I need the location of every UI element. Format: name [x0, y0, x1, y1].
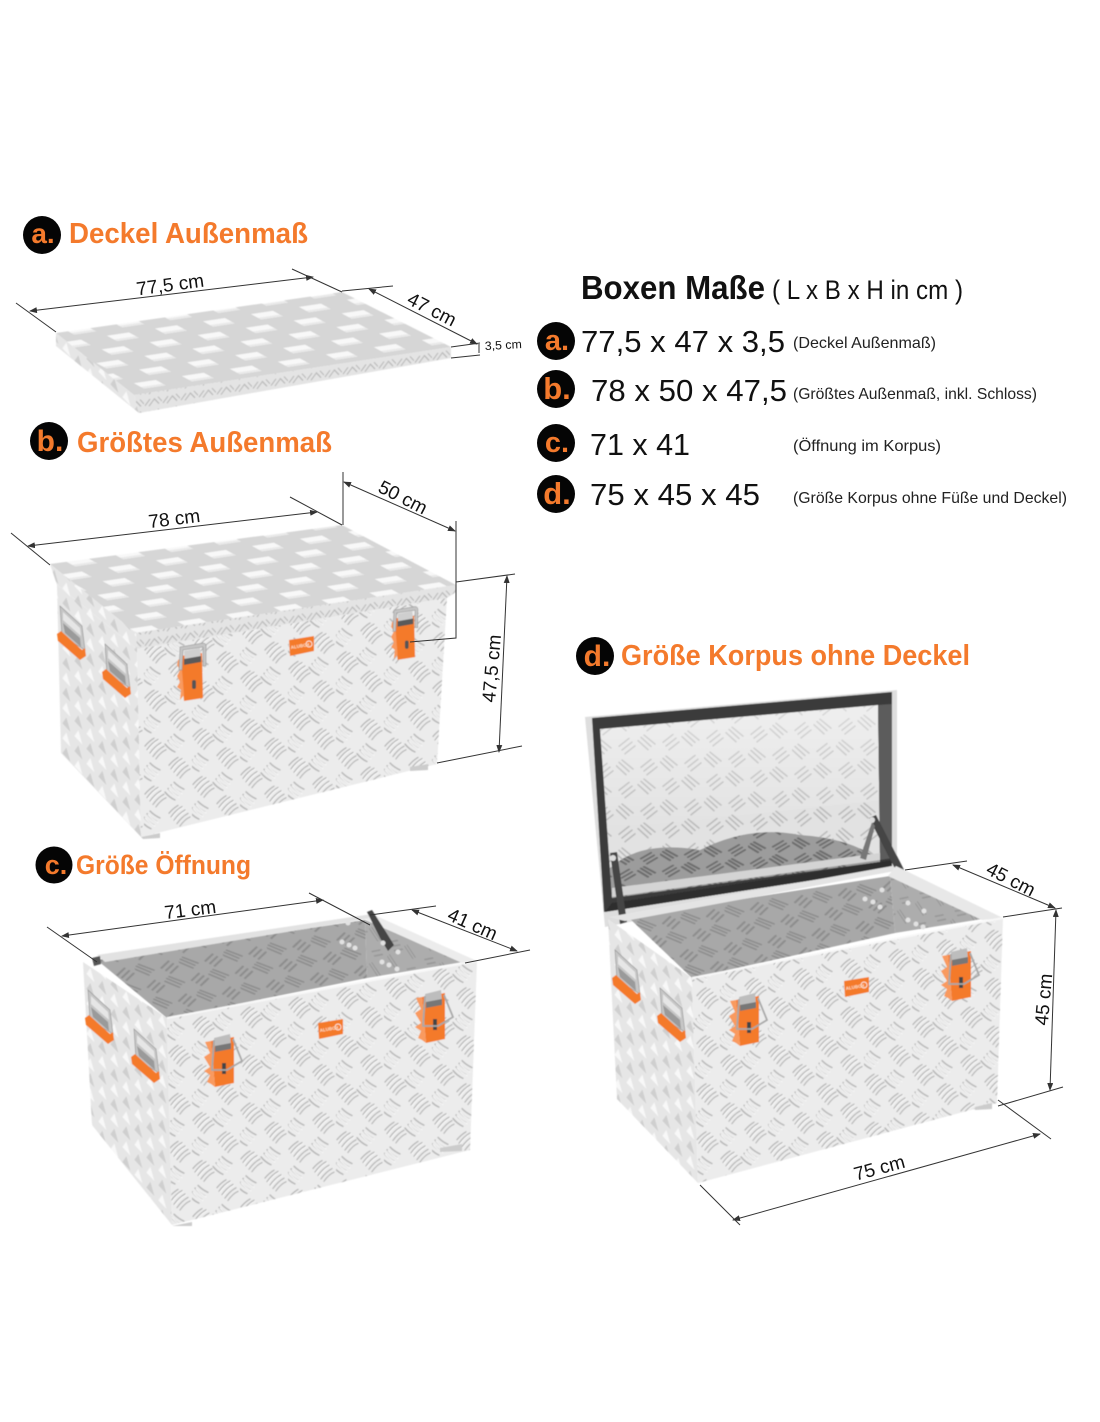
illustration b: closed box [50, 525, 456, 839]
dimensions a: 77,5 x 47 x 3,5 cm: 3,5 cm [484, 337, 522, 353]
summary table: Boxen Maße: a. [545, 325, 569, 357]
heading b: Größtes Außenmaß: b. [37, 425, 63, 458]
summary table: Boxen Maße: Boxen Maße [581, 269, 765, 306]
summary table: Boxen Maße: (Größtes Außenmaß, inkl. Schloss) [793, 386, 1037, 403]
summary table: Boxen Maße: d. [543, 476, 571, 511]
dimensions d: 75 x 45 x 45 cm: 75 cm [852, 1152, 907, 1186]
illustration a: lid [56, 292, 451, 413]
summary table: Boxen Maße: 77,5 x 47 x 3,5 [581, 324, 785, 359]
summary table: Boxen Maße: 78 x 50 x 47,5 [591, 373, 787, 408]
summary table: Boxen Maße: 75 x 45 x 45 [590, 477, 760, 512]
dimensions d: 75 x 45 x 45 cm: 45 cm [1032, 973, 1057, 1026]
dimensions c: 71 x 41 cm: 71 cm [163, 897, 217, 924]
dimensions c: 71 x 41 cm [47, 893, 530, 963]
dimensions d: 75 x 45 x 45 cm: 45 cm [983, 859, 1038, 901]
summary table: Boxen Maße: (Öffnung im Korpus) [793, 437, 941, 455]
open lid [585, 690, 918, 927]
box interior [628, 876, 895, 978]
summary table: Boxen Maße: (Deckel Außenmaß) [793, 335, 936, 352]
heading a: Deckel Außenmaß: a. [31, 218, 55, 249]
heading d: Größe Korpus ohne Deckel: d. [584, 640, 610, 673]
dimensions a: 77,5 x 47 x 3,5 cm: 47 cm [404, 289, 459, 331]
heading a: Deckel Außenmaß: Deckel Außenmaß [69, 218, 308, 250]
heading b: Größtes Außenmaß [30, 422, 332, 460]
dimensions d: 75 x 45 x 45 cm [700, 859, 1063, 1225]
summary table: Boxen Maße [537, 269, 1067, 513]
summary table: Boxen Maße: ( L x B x H in cm ) [772, 275, 963, 305]
summary table: Boxen Maße: 71 x 41 [590, 427, 690, 462]
heading c: Größe Öffnung: Größe Öffnung [76, 850, 251, 880]
dimensions b: 78 x 50 x 47,5 cm: 78 cm [147, 506, 201, 533]
heading d: Größe Korpus ohne Deckel: Größe Korpus ohne Deckel [621, 640, 970, 672]
heading c: Größe Öffnung: c. [45, 850, 67, 880]
dimensions c: 71 x 41 cm: 41 cm [444, 905, 500, 945]
summary table: Boxen Maße: c. [545, 427, 569, 459]
heading c: Größe Öffnung [36, 846, 251, 884]
dimensions a: 77,5 x 47 x 3,5 cm [16, 269, 522, 358]
dimensions a: 77,5 x 47 x 3,5 cm: 77,5 cm [135, 271, 205, 300]
summary table: Boxen Maße: (Größe Korpus ohne Füße und Deckel) [793, 490, 1067, 507]
illustration d: box with open lid [585, 690, 1003, 1183]
box body [608, 919, 698, 1183]
dimensions b: 78 x 50 x 47,5 cm: 47,5 cm [479, 634, 506, 703]
dimensions b: 78 x 50 x 47,5 cm [11, 472, 522, 763]
heading a: Deckel Außenmaß [23, 216, 308, 254]
dimensions b: 78 x 50 x 47,5 cm: 50 cm [375, 477, 430, 519]
illustration c: open box without lid [83, 910, 477, 1226]
summary table: Boxen Maße: b. [543, 371, 571, 406]
heading b: Größtes Außenmaß: Größtes Außenmaß [77, 427, 332, 459]
